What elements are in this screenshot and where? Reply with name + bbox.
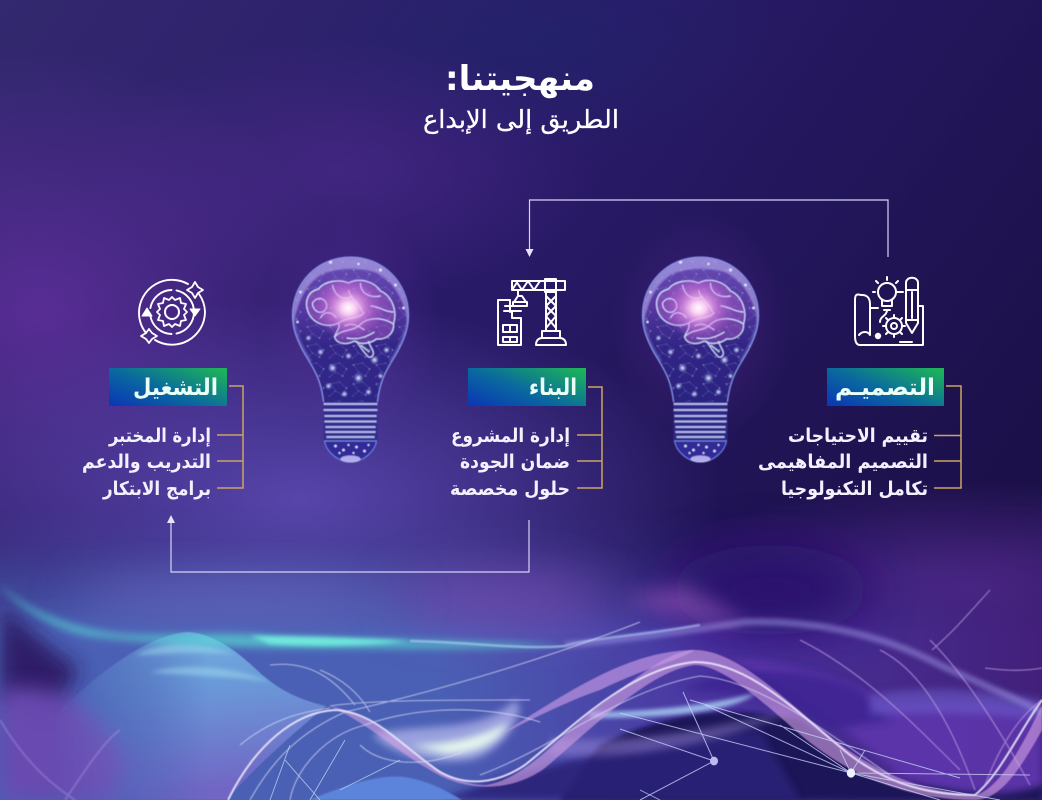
waves [0,585,1042,800]
label: build: البناء [529,375,577,401]
connector: operate [217,386,243,488]
list: design: التصميم المفاهيمى [758,451,928,473]
label: design: التصميـم [835,375,935,401]
list: build [450,425,570,500]
lower right dark and violet planes [560,712,1042,800]
list: operate: التدريب والدعم [82,451,211,473]
bright patch [372,700,519,761]
list: operate: برامج الابتكار [102,478,211,500]
arrow: build to operate [167,515,529,572]
icon: crane and building [498,279,566,345]
list: build: حلول مخصصة [450,478,570,500]
icon: gear with cycle arrows [139,280,205,345]
bottom blue patch [310,777,462,800]
list: operate [82,425,211,500]
lightbulb: right [610,210,790,462]
teal streak [0,585,565,648]
icon: blueprint with bulb, pencil and gear [855,277,923,345]
list: build: إدارة المشروع [451,425,570,447]
lilac ribbon [330,650,1042,800]
lower blue field [0,542,1042,800]
list: build: ضمان الجودة [460,451,570,473]
list: design [758,425,928,500]
blue hump [50,632,326,800]
connector: design [934,386,961,488]
thin network lines [620,692,1030,800]
arrow: design to build [526,200,888,257]
label: operate [109,368,227,406]
lightbulb: left [260,210,440,462]
panel: build [450,279,602,500]
list: operate: إدارة المختبر [108,425,211,447]
white strands [228,662,1042,800]
panel: design [758,277,961,500]
label: build [468,368,586,406]
light blue streaks [590,693,756,718]
connector: build [577,387,602,488]
label: operate: التشغيل [133,375,218,401]
label: design [827,368,944,406]
title: منهجيتنا: [445,59,595,99]
panel: operate [82,280,243,500]
list: design: تكامل التكنولوجيا [781,478,928,500]
network nodes [710,757,718,765]
list: design: تقييم الاحتياجات [788,425,928,447]
subtitle: الطريق إلى الإبداع [423,105,619,135]
